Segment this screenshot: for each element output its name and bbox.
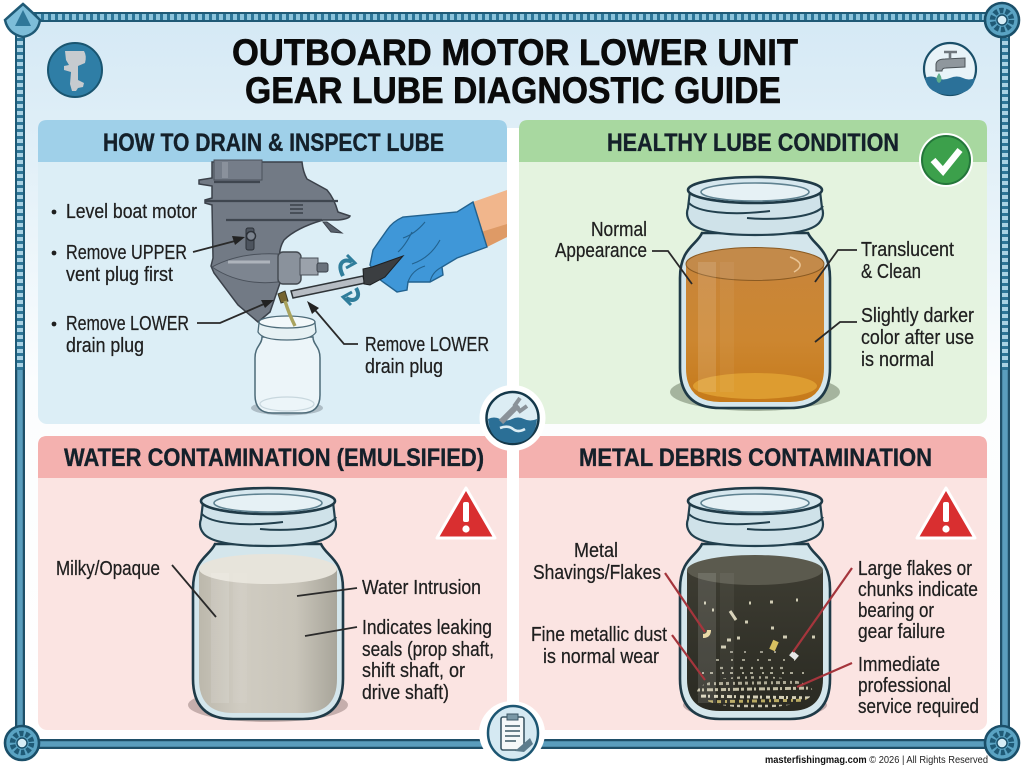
text: translucent and clean [861, 239, 954, 283]
leader lines: debris jar [665, 568, 852, 687]
text: metal shavings: Shavings/Flakes [533, 562, 661, 584]
text: indicates leaking seals: Indicates leaking [362, 617, 492, 639]
panel: healthy lube condition [519, 120, 987, 424]
icon: center wrench and waves badge [480, 385, 546, 451]
text: remove upper vent plug: vent plug first [66, 264, 173, 286]
heading: water contamination: WATER CONTAMINATION (EMULSIFIED) [64, 444, 484, 472]
text: slightly darker: color after use [861, 327, 974, 349]
icon: red warning triangle [437, 488, 495, 538]
icon: outboard motor badge [48, 43, 102, 97]
title [232, 32, 798, 111]
text: immediate service [858, 654, 979, 718]
text: remove lower drain plug [52, 313, 189, 357]
icon: rotation arrows [340, 255, 358, 305]
heading: metal debris: METAL DEBRIS CONTAMINATION [579, 444, 932, 472]
illustration: dark jar with debris [680, 488, 830, 720]
text: metal shavings: Metal [574, 540, 618, 562]
title: OUTBOARD MOTOR LOWER UNIT [232, 32, 798, 73]
text: indicates leaking seals: shift shaft, or [362, 660, 465, 682]
illustration: milky jar [188, 488, 348, 722]
panel: metal debris contamination [519, 436, 987, 730]
text: level boat motor: Level boat motor [66, 201, 197, 223]
metal flakes and dust [695, 600, 815, 706]
text: metal shavings [533, 540, 661, 584]
illustration: empty glass jar [251, 301, 323, 416]
text: remove lower drain plug: Remove LOWER [66, 313, 189, 335]
arrow: to lower plug [197, 300, 274, 323]
text: translucent and clean: & Clean [861, 261, 921, 283]
heading: healthy: HEALTHY LUBE CONDITION [607, 129, 899, 157]
title: GEAR LUBE DIAGNOSTIC GUIDE [245, 70, 781, 111]
text: immediate service: service required [858, 696, 979, 718]
text: remove upper vent plug [52, 242, 187, 286]
text: fine metallic dust: Fine metallic dust [531, 624, 667, 646]
leader lines: milky jar [172, 565, 357, 636]
corner ornament: bottom right [985, 726, 1019, 760]
icon: clipboard badge [479, 701, 545, 765]
text: normal appearance: Normal [591, 219, 647, 241]
text: slightly darker: Slightly darker [861, 305, 974, 327]
text: indicates leaking seals: seals (prop shaft, [362, 639, 494, 661]
text: remove lower drain plug (right): Remove LOWER [365, 334, 489, 356]
text: remove lower drain plug: drain plug [66, 335, 144, 357]
leader lines: healthy jar [652, 250, 857, 342]
illustration: amber jar [670, 177, 840, 411]
icon: red warning triangle [917, 488, 975, 538]
panel: water contamination [38, 436, 507, 730]
text: large flakes: gear failure [858, 621, 945, 643]
corner ornament: top right [985, 3, 1019, 37]
text: large flakes: chunks indicate [858, 579, 978, 601]
panel: how to drain and inspect lube [38, 120, 507, 424]
illustration: screwdriver [291, 256, 403, 298]
text: large flakes: Large flakes or [858, 558, 972, 580]
text: remove lower drain plug (right) [365, 334, 489, 378]
corner ornament: top left [5, 4, 40, 37]
arrow: to upper plug [193, 236, 245, 252]
illustration: outboard lower unit [199, 160, 350, 322]
illustration: arm and gloved hand [370, 190, 507, 292]
text: immediate service: Immediate [858, 654, 940, 676]
text: slightly darker: is normal [861, 349, 934, 371]
text: milky opaque: Milky/Opaque [56, 558, 160, 580]
corner ornament: bottom left [5, 726, 39, 760]
icon: green check [919, 133, 973, 187]
text: remove lower drain plug (right): drain plug [365, 356, 443, 378]
text: remove upper vent plug: Remove UPPER [66, 242, 187, 264]
text: translucent and clean: Translucent [861, 239, 954, 261]
text: normal appearance: Appearance [555, 240, 647, 262]
text: fine metallic dust [531, 624, 667, 668]
text: large flakes: bearing or [858, 600, 934, 622]
text: fine metallic dust: is normal wear [543, 646, 659, 668]
text: normal appearance [555, 219, 647, 262]
text: large flakes [858, 558, 978, 643]
icon: water faucet badge [924, 43, 976, 95]
text: indicates leaking seals [362, 617, 494, 704]
heading: how to drain: HOW TO DRAIN & INSPECT LUBE [103, 129, 444, 157]
text: slightly darker [861, 305, 974, 371]
text: indicates leaking seals: drive shaft) [362, 682, 449, 704]
arrow: from right drain label [307, 301, 358, 344]
text: water intrusion: Water Intrusion [362, 577, 481, 599]
text: immediate service: professional [858, 675, 951, 697]
